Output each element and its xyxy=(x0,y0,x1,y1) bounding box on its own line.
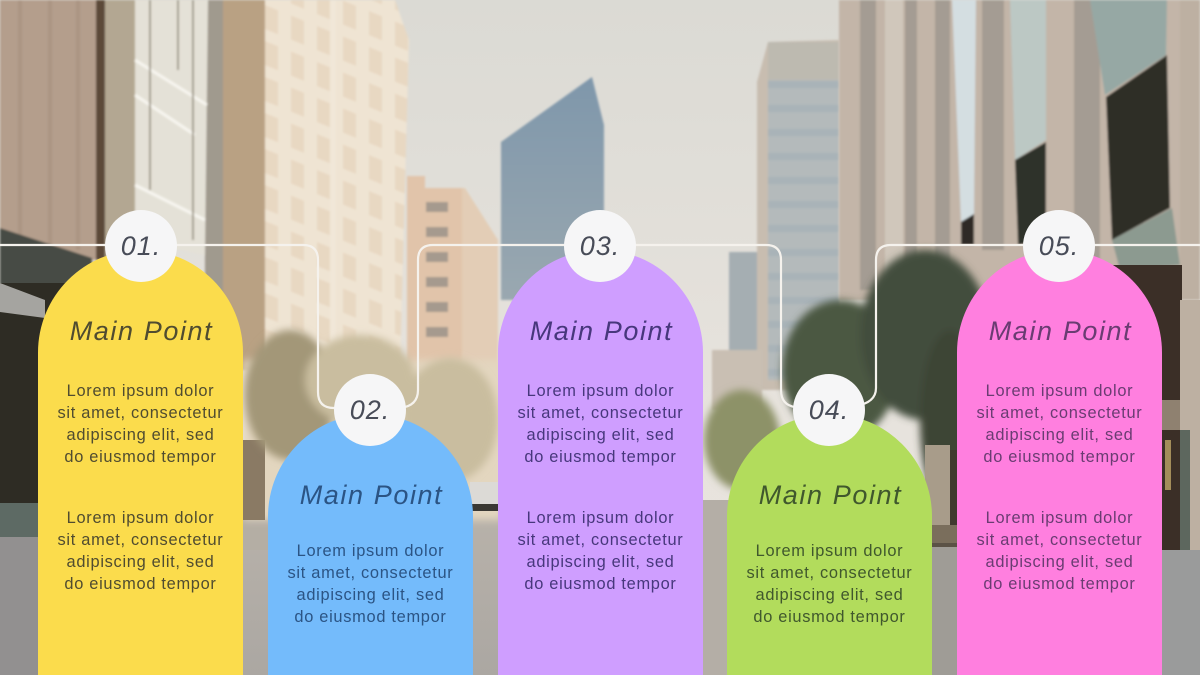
number badge 04 xyxy=(793,374,865,446)
number badge 05: 05. xyxy=(1039,231,1079,261)
text block: point 3 first paragraph: adipiscing elit, sed xyxy=(527,426,674,444)
text block: point 5 second paragraph: do eiusmod tempor xyxy=(983,575,1136,593)
heading: point 1: Main Point xyxy=(70,316,213,346)
road and sidewalks xyxy=(0,512,1200,675)
text block: point 4: do eiusmod tempor xyxy=(753,608,906,626)
text block: point 2 xyxy=(288,542,453,626)
text block: point 3 second paragraph: adipiscing elit, sed xyxy=(527,553,674,571)
panel: point 5 xyxy=(957,250,1162,675)
text block: point 1 first paragraph: do eiusmod tempor xyxy=(64,448,217,466)
text block: point 1 first paragraph xyxy=(58,382,223,466)
heading: point 5: Main Point xyxy=(989,316,1132,346)
heading: point 4: Main Point xyxy=(759,480,902,510)
heading: point 2: Main Point xyxy=(300,480,443,510)
text block: point 3 second paragraph xyxy=(518,509,683,593)
number badge 04: 04. xyxy=(809,395,849,425)
right facade xyxy=(839,0,1200,300)
text block: point 3 second paragraph: do eiusmod tempor xyxy=(524,575,677,593)
heading: point 3: Main Point xyxy=(530,316,673,346)
text block: point 1 second paragraph xyxy=(58,509,223,593)
text block: point 1 second paragraph: do eiusmod tempor xyxy=(64,575,217,593)
number badge 01: 01. xyxy=(121,231,161,261)
street trees xyxy=(243,330,503,520)
number badge 01 xyxy=(105,210,177,282)
text block: point 2: Lorem ipsum dolor xyxy=(297,542,444,560)
text block: point 1 first paragraph: sit amet, consectetur xyxy=(58,404,223,422)
panel: point 4 xyxy=(727,414,932,675)
distant towers xyxy=(407,40,839,410)
text block: point 5 first paragraph: do eiusmod tempor xyxy=(983,448,1136,466)
text block: point 1 second paragraph: adipiscing elit, sed xyxy=(67,553,214,571)
number badge 02 xyxy=(334,374,406,446)
right storefront xyxy=(1100,265,1200,675)
text block: point 5 second paragraph: sit amet, consectetur xyxy=(977,531,1142,549)
text block: point 1 second paragraph: Lorem ipsum dolor xyxy=(67,509,214,527)
text block: point 5 second paragraph xyxy=(977,509,1142,593)
left cream building xyxy=(0,0,409,370)
left storefront xyxy=(0,283,90,675)
number badge 03 xyxy=(564,210,636,282)
text block: point 3 first paragraph: do eiusmod tempor xyxy=(524,448,677,466)
number badge 03: 03. xyxy=(580,231,620,261)
text block: point 5 first paragraph: Lorem ipsum dolor xyxy=(986,382,1133,400)
text block: point 3 first paragraph xyxy=(518,382,683,466)
panel: point 1 xyxy=(38,250,243,675)
text block: point 5 first paragraph xyxy=(977,382,1142,466)
text block: point 3 second paragraph: Lorem ipsum dolor xyxy=(527,509,674,527)
text block: point 1 second paragraph: sit amet, consectetur xyxy=(58,531,223,549)
text block: point 1 first paragraph: Lorem ipsum dolor xyxy=(67,382,214,400)
text block: point 2: sit amet, consectetur xyxy=(288,564,453,582)
text block: point 5 first paragraph: sit amet, consectetur xyxy=(977,404,1142,422)
text block: point 4: Lorem ipsum dolor xyxy=(756,542,903,560)
text block: point 4: adipiscing elit, sed xyxy=(756,586,903,604)
text block: point 5 first paragraph: adipiscing elit, sed xyxy=(986,426,1133,444)
left facade xyxy=(0,0,98,260)
text block: point 3 second paragraph: sit amet, consectetur xyxy=(518,531,683,549)
text block: point 5 second paragraph: adipiscing elit, sed xyxy=(986,553,1133,571)
text block: point 3 first paragraph: Lorem ipsum dolor xyxy=(527,382,674,400)
number badge 02: 02. xyxy=(350,395,390,425)
panel: point 3 xyxy=(498,250,703,675)
text block: point 5 second paragraph: Lorem ipsum dolor xyxy=(986,509,1133,527)
text block: point 4 xyxy=(747,542,912,626)
text block: point 4: sit amet, consectetur xyxy=(747,564,912,582)
text block: point 2: do eiusmod tempor xyxy=(294,608,447,626)
panel: point 2 xyxy=(268,414,473,675)
text block: point 2: adipiscing elit, sed xyxy=(297,586,444,604)
text block: point 3 first paragraph: sit amet, consectetur xyxy=(518,404,683,422)
text block: point 1 first paragraph: adipiscing elit, sed xyxy=(67,426,214,444)
number badge 05 xyxy=(1023,210,1095,282)
